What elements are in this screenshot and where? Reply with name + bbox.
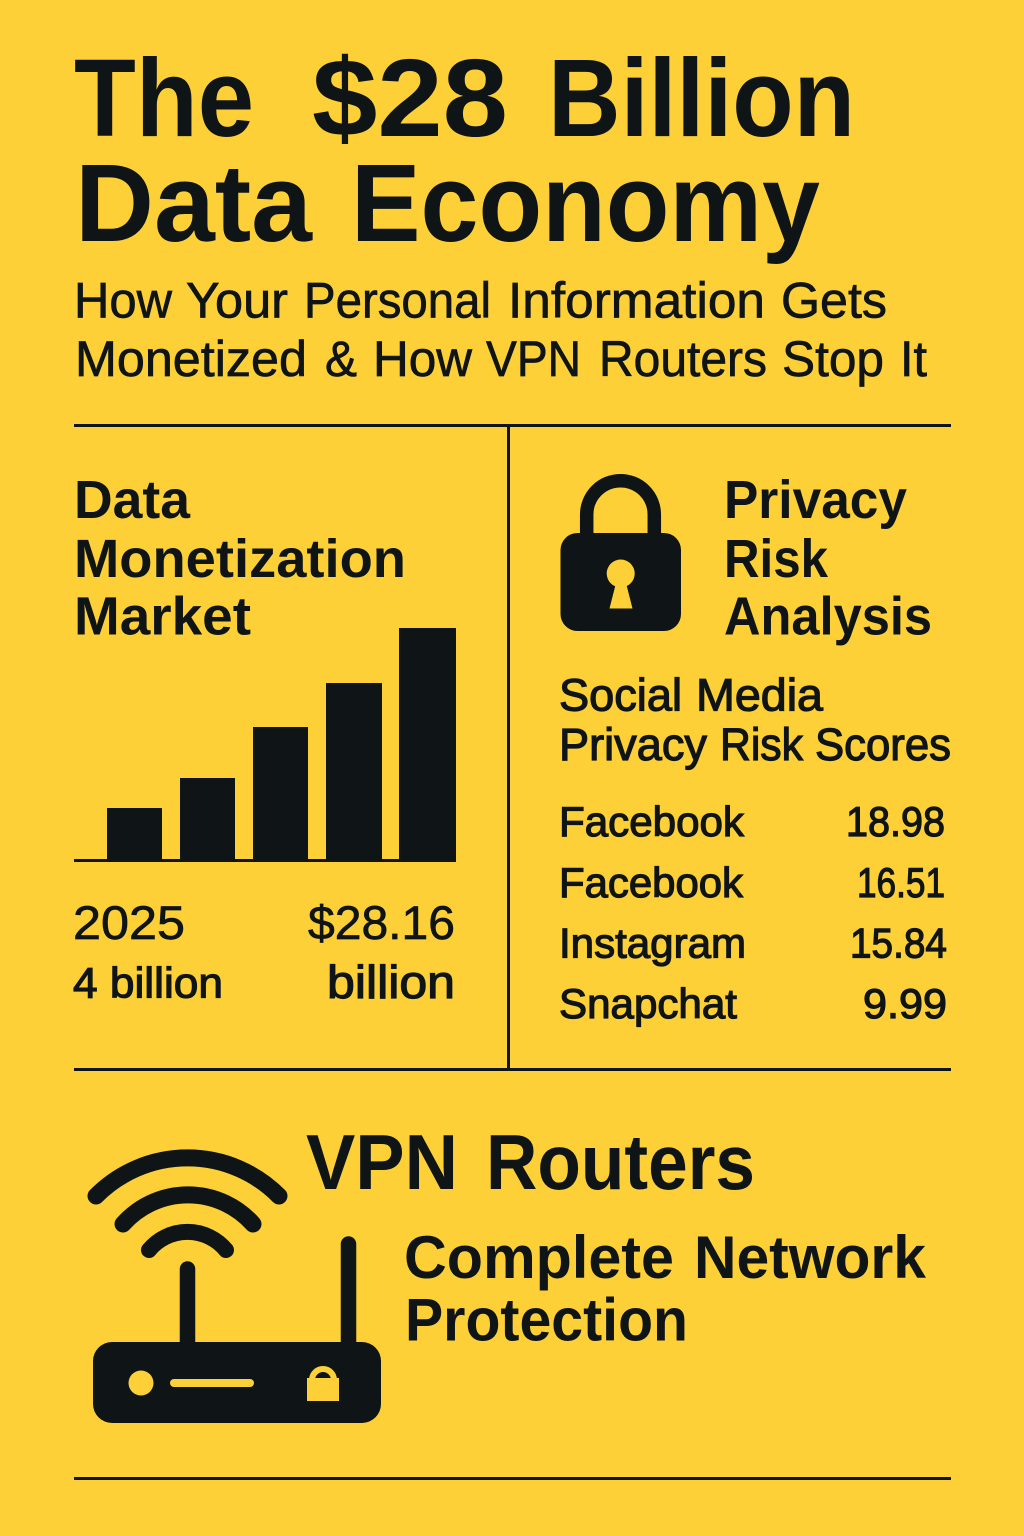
table: risk scores: 9.99 [863,980,947,1027]
heading: vpn routers [306,1118,755,1206]
subheading: social media privacy risk scores: Scores [815,719,951,770]
heading: data monetization market: Monetization [74,529,406,589]
heading: privacy risk analysis: Risk [724,529,829,589]
subheading: complete network protection [404,1224,927,1354]
chart label: 2025 value [73,896,223,1008]
subtitle: & [325,331,357,387]
subheading: complete network protection: Protection [405,1286,688,1354]
subheading: complete network protection: Complete [404,1224,674,1291]
panel: data monetization market [73,470,456,1008]
subtitle: How [373,331,473,387]
table: risk scores: Facebook [559,859,744,906]
table: risk scores [559,798,947,1027]
heading: privacy risk analysis: Privacy [724,470,907,530]
title: $28 [312,37,508,160]
subheading: social media privacy risk scores: Social [559,670,682,720]
chart label: 2025 value: 2025 [73,896,185,949]
subtitle: Your [186,272,288,328]
subtitle: Gets [781,272,887,328]
subheading: social media privacy risk scores [559,670,951,770]
subtitle: Stop [782,331,884,387]
subheading: social media privacy risk scores: Privacy [559,719,707,770]
subtitle: Routers [599,331,767,387]
title: Billion [548,37,855,160]
subtitle: Personal [304,272,491,328]
chart label: final value: $28.16 [308,896,455,949]
table: risk scores: 15.84 [850,920,947,966]
chart label: 2025 value: 4 billion [73,960,223,1008]
chart label: final value [308,896,455,1008]
bar chart [74,628,456,862]
subtitle: Information [508,272,765,328]
icon: padlock [560,481,681,631]
subtitle: How [74,272,173,328]
title: The [74,37,254,160]
subtitle: Monetized [75,331,307,387]
table: risk scores: Facebook [559,798,745,845]
subheading: social media privacy risk scores: Media [696,670,824,720]
heading: vpn routers: Routers [486,1118,755,1206]
heading: data monetization market [74,470,406,646]
subtitle [74,272,927,387]
table: risk scores: 16.51 [857,859,945,906]
heading: privacy risk analysis [724,470,932,646]
chart label: final value: billion [327,956,455,1008]
title [74,37,855,265]
title: Data [75,142,313,265]
title: Economy [351,142,820,265]
heading: data monetization market: Market [74,586,251,646]
table: risk scores: Instagram [559,920,746,966]
table: risk scores: 18.98 [846,798,945,845]
panel: vpn routers [93,1118,927,1423]
heading: privacy risk analysis: Analysis [724,586,932,646]
subtitle: VPN [486,331,581,387]
icon: wifi router [93,1158,381,1423]
subheading: complete network protection: Network [694,1224,927,1291]
heading: vpn routers: VPN [306,1118,458,1206]
subtitle: It [900,331,927,387]
table: risk scores: Snapchat [559,980,737,1027]
subheading: social media privacy risk scores: Risk [720,719,803,770]
panel: privacy risk analysis [559,470,951,1027]
heading: data monetization market: Data [74,470,191,530]
